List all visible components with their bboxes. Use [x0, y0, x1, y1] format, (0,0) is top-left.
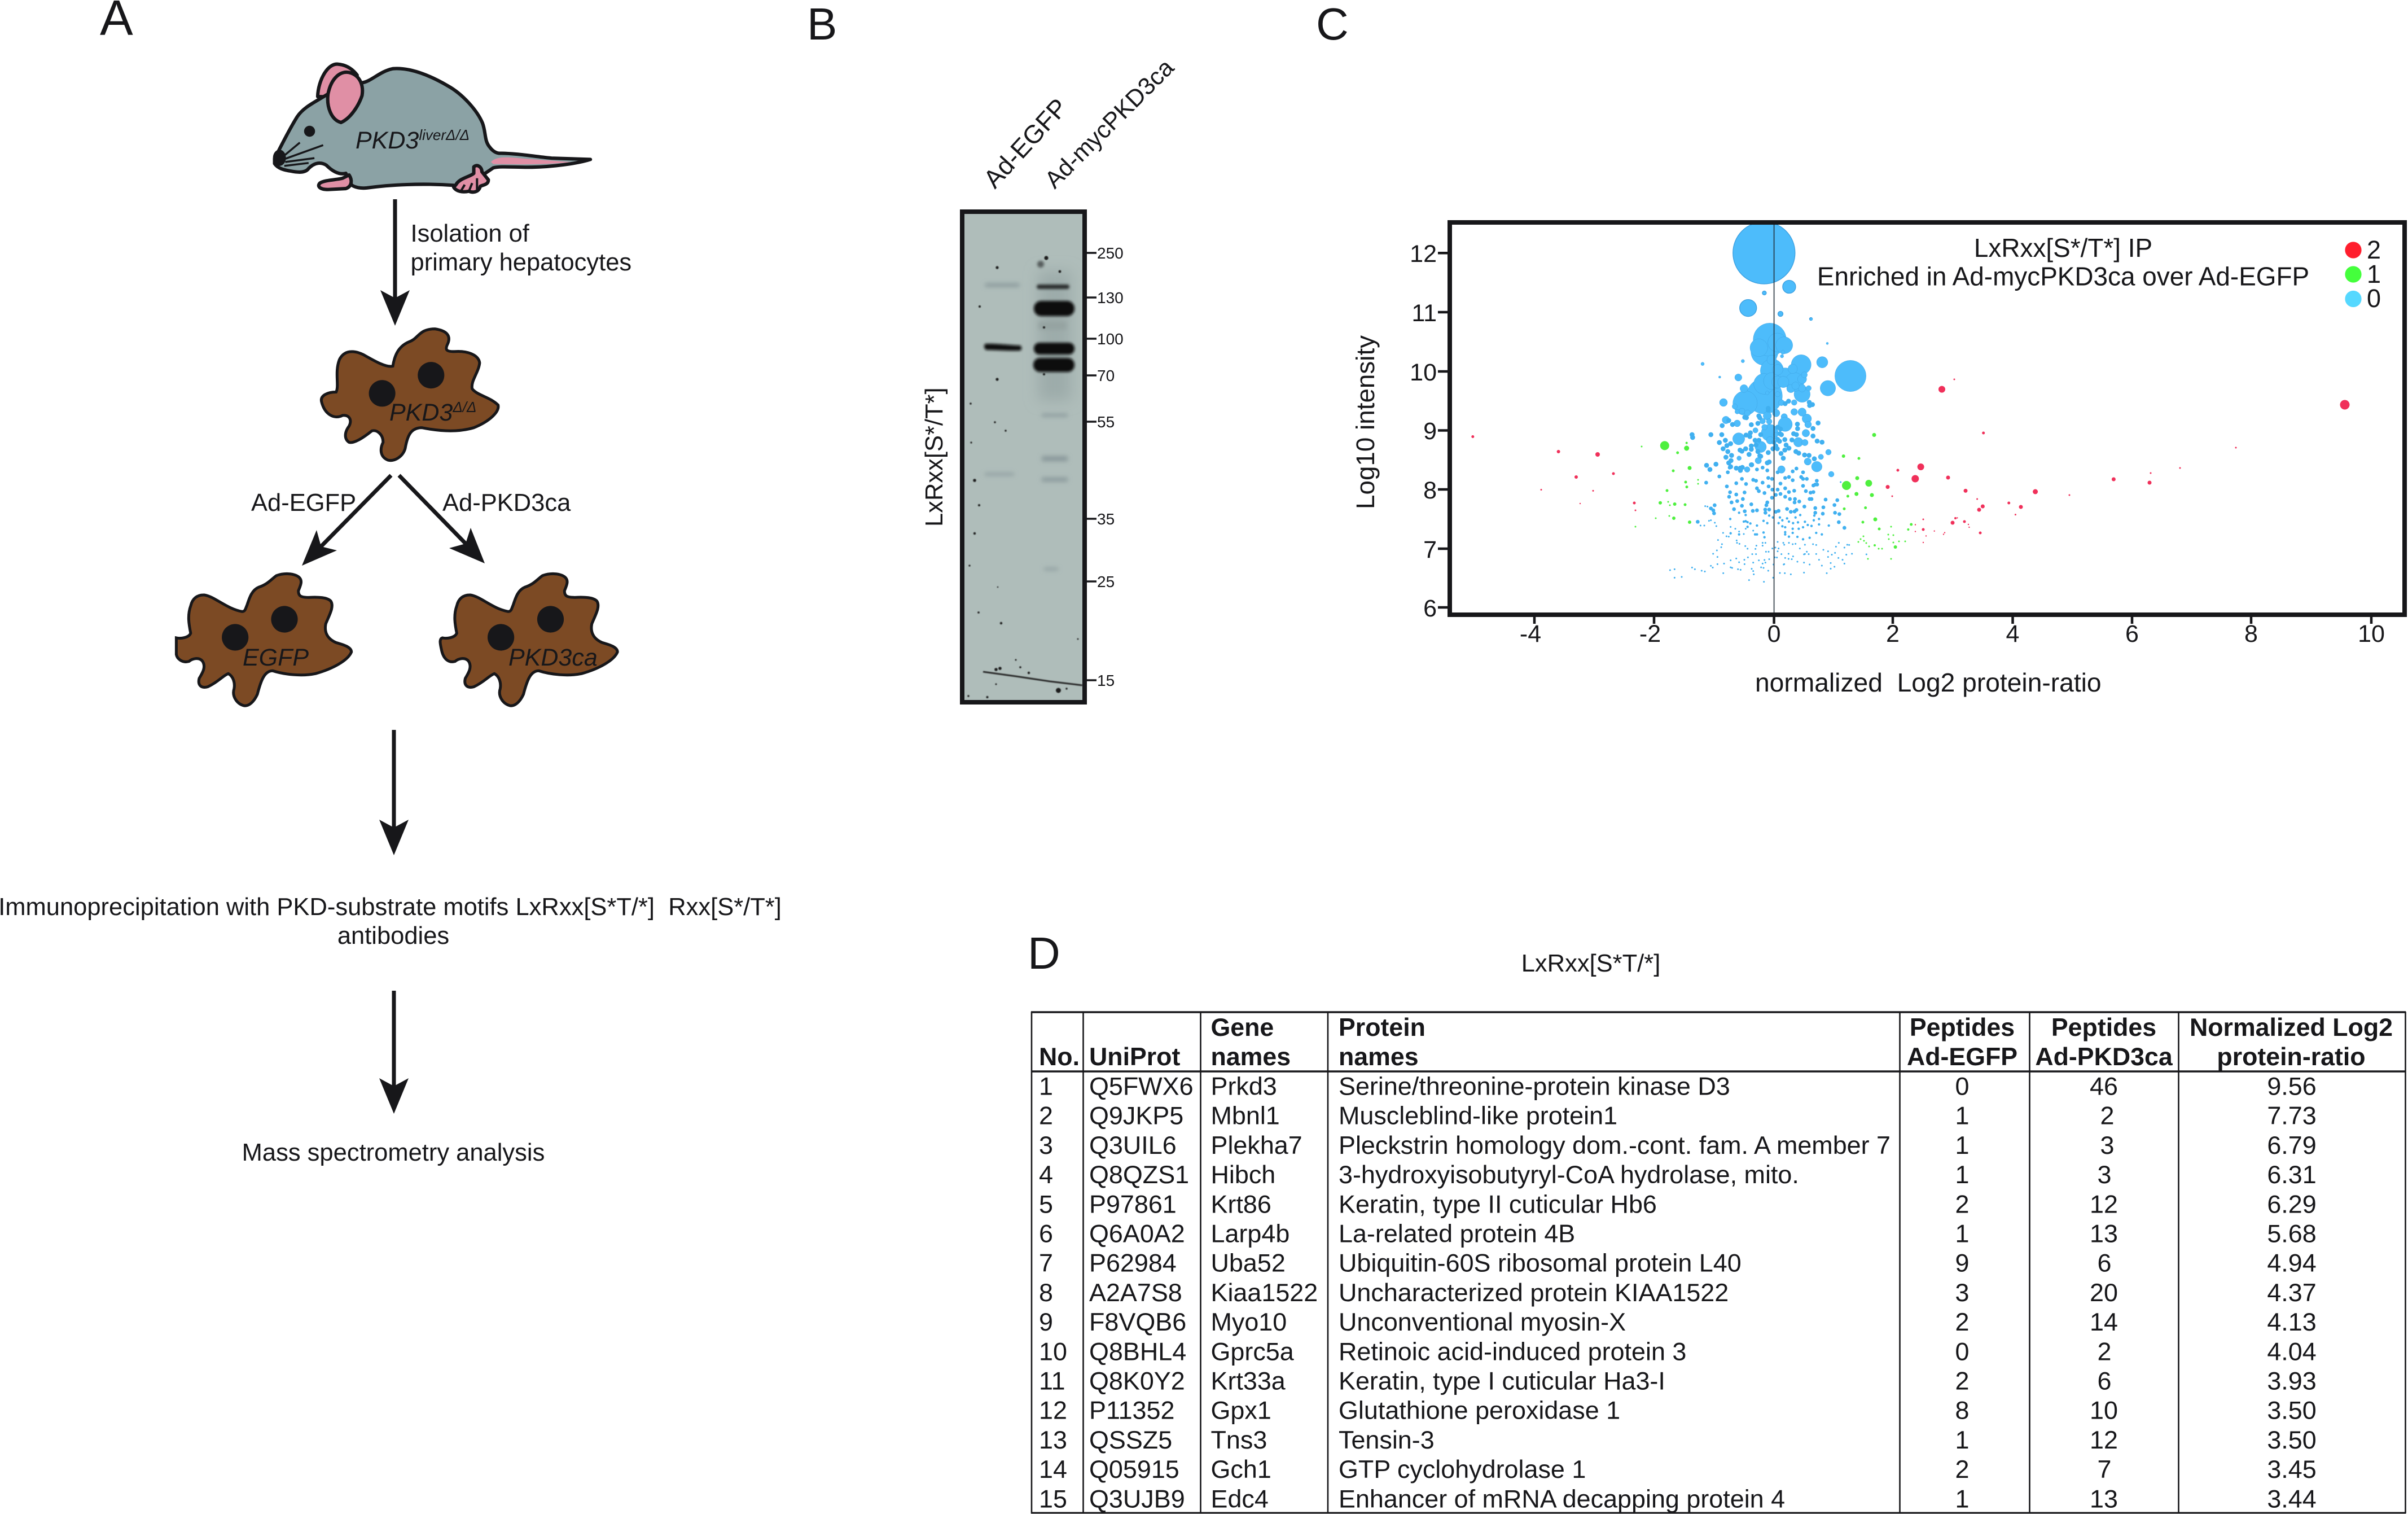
- plot frame and zero line: [1450, 222, 2405, 615]
- row 9: Myo10: [1211, 1307, 1287, 1336]
- row 9: 4.13: [2267, 1307, 2317, 1336]
- icon: EGFP hepatocyte: EGFP: [243, 644, 309, 671]
- row 1: Serine/threonine-protein kinase D3: [1339, 1071, 1730, 1101]
- row 1: 1: [1039, 1071, 1053, 1101]
- row 8: 8: [1039, 1278, 1053, 1307]
- molecular weight markers: 25: [1097, 573, 1115, 590]
- row 8: 3: [1955, 1278, 1969, 1307]
- row 15: 1: [1955, 1484, 1969, 1513]
- row 8: A2A7S8: [1089, 1278, 1182, 1307]
- row 13: QSSZ5: [1089, 1425, 1172, 1454]
- row 2: [1039, 1101, 2317, 1130]
- one-peptide proteins: green dots: [1634, 433, 1913, 560]
- blot image: [962, 212, 1085, 702]
- table header: UniProt: [1089, 1043, 1180, 1071]
- row 10: 10: [1039, 1337, 1067, 1366]
- row 9: F8VQB6: [1089, 1307, 1186, 1336]
- row 13: [1039, 1425, 2317, 1454]
- row 6: 6: [1039, 1219, 1053, 1248]
- x axis title: normalized Log2 protein-ratio: [1755, 668, 2102, 697]
- row 9: [1039, 1307, 2317, 1336]
- row 2: 1: [1955, 1101, 1969, 1130]
- chart title: Enriched in Ad-mycPKD3ca over Ad-EGFP: [1817, 262, 2309, 291]
- row 9: 2: [1955, 1307, 1969, 1336]
- y axis ticks and labels: 10: [1410, 359, 1437, 386]
- zero-peptide proteins: lower medium dots: [1698, 464, 1844, 528]
- row 9: Unconventional myosin-X: [1339, 1307, 1626, 1336]
- row 15: Enhancer of mRNA decapping protein 4: [1339, 1484, 1785, 1513]
- row 9: 14: [2090, 1307, 2118, 1336]
- row 2: Q9JKP5: [1089, 1101, 1183, 1130]
- row 15: [1039, 1484, 2317, 1513]
- row 3: 6.79: [2267, 1131, 2317, 1159]
- table title: LxRxx[S*T/*]: [1521, 950, 1660, 977]
- row 14: 14: [1039, 1455, 1067, 1484]
- x axis ticks and labels: 8: [2244, 620, 2258, 647]
- row 3: [1039, 1131, 2317, 1159]
- row 5: Krt86: [1211, 1189, 1271, 1218]
- icon: PKD3ca hepatocyte: PKD3ca: [508, 644, 598, 671]
- row 12: 12: [1039, 1396, 1067, 1425]
- arrow: to PKD3ca cell: [399, 475, 485, 563]
- y axis ticks and labels: [1410, 240, 1448, 622]
- row 5: [1039, 1189, 2317, 1218]
- x axis ticks and labels: -4: [1520, 620, 1541, 647]
- row 12: [1039, 1396, 2317, 1425]
- zero-peptide proteins: top bubbles: [1733, 222, 1813, 321]
- zero-peptide proteins: small dots: [1730, 513, 1829, 539]
- row 11: 11: [1039, 1366, 1065, 1395]
- arrow: mouse to hepatocyte: [380, 199, 410, 326]
- table grid: [1031, 1012, 2406, 1513]
- row 11: Keratin, type I cuticular Ha3-I: [1339, 1366, 1665, 1395]
- x axis ticks and labels: 10: [2358, 620, 2385, 647]
- row 5: P97861: [1089, 1189, 1177, 1218]
- legend: [2345, 235, 2381, 313]
- row 11: [1039, 1366, 2317, 1395]
- chart title: LxRxx[S*/T*] IP: [1974, 233, 2152, 262]
- row 2: Muscleblind-like protein1: [1339, 1101, 1617, 1130]
- row 7: 9: [1955, 1249, 1969, 1277]
- row 12: 3.50: [2267, 1396, 2317, 1425]
- text: immunoprecipitation step: antibodies: [337, 922, 449, 949]
- row 14: Q05915: [1089, 1455, 1179, 1484]
- arrow: to immunoprecipitation: [379, 730, 409, 855]
- row 7: 6: [2098, 1249, 2111, 1277]
- row 12: Glutathione peroxidase 1: [1339, 1396, 1620, 1425]
- row 13: 12: [2090, 1425, 2118, 1454]
- row 14: GTP cyclohydrolase 1: [1339, 1455, 1586, 1484]
- panel letter C: C: [1316, 0, 1349, 49]
- row 4: 3-hydroxyisobutyryl-CoA hydrolase, mito.: [1339, 1160, 1799, 1189]
- row 11: 2: [1955, 1366, 1969, 1395]
- table header: Gene: [1211, 1014, 1274, 1042]
- row 7: 7: [1039, 1249, 1053, 1277]
- text: Ad-PKD3ca arm label: Ad-PKD3ca: [442, 489, 571, 517]
- text: isolation of primary hepatocytes: Isolation of: [411, 220, 529, 247]
- row 4: Q8QZS1: [1089, 1160, 1189, 1189]
- panel letter D: D: [1028, 928, 1060, 978]
- y axis ticks and labels: 11: [1411, 300, 1437, 327]
- mouse genotype label: liverΔ/Δ: [419, 126, 470, 143]
- row 15: Edc4: [1211, 1484, 1269, 1513]
- row 1: 9.56: [2267, 1071, 2317, 1101]
- row 6: [1039, 1219, 2317, 1248]
- icon: EGFP hepatocyte: [176, 574, 352, 706]
- row 8: Uncharacterized protein KIAA1522: [1339, 1278, 1729, 1307]
- row 6: 13: [2090, 1219, 2118, 1248]
- row 10: [1039, 1337, 2317, 1366]
- row 14: [1039, 1455, 2317, 1484]
- row 5: 2: [1955, 1189, 1969, 1218]
- row 3: 3: [1039, 1131, 1053, 1159]
- row 3: 1: [1955, 1131, 1969, 1159]
- row 4: 6.31: [2267, 1160, 2317, 1189]
- row 12: P11352: [1089, 1396, 1174, 1425]
- row 14: Gch1: [1211, 1455, 1271, 1484]
- row 15: 15: [1039, 1484, 1067, 1513]
- row 5: 6.29: [2267, 1189, 2317, 1218]
- x axis ticks and labels: 4: [2006, 620, 2019, 647]
- x axis ticks and labels: [1520, 616, 2385, 647]
- row 11: 6: [2098, 1366, 2111, 1395]
- row 3: Pleckstrin homology dom.-cont. fam. A member 7: [1339, 1131, 1891, 1159]
- axis label LxRxx: LxRxx[S*/T*]: [921, 387, 948, 527]
- y axis ticks and labels: 6: [1423, 595, 1437, 622]
- molecular weight markers: 250: [1097, 244, 1124, 262]
- panel letter B: B: [807, 0, 837, 49]
- row 1: 0: [1955, 1071, 1969, 1101]
- row 5: 5: [1039, 1189, 1053, 1218]
- lane label Ad-mycPKD3ca: Ad-mycPKD3ca: [1039, 54, 1179, 194]
- mouse genotype label: PKD3: [356, 127, 419, 154]
- row 8: 20: [2090, 1278, 2118, 1307]
- text: Ad-EGFP arm label: Ad-EGFP: [251, 489, 356, 517]
- y axis ticks and labels: 7: [1423, 536, 1437, 563]
- row 7: P62984: [1089, 1249, 1177, 1277]
- table header: Ad-PKD3ca: [2035, 1043, 2173, 1071]
- row 6: La-related protein 4B: [1339, 1219, 1575, 1248]
- row 10: Retinoic acid-induced protein 3: [1339, 1337, 1686, 1366]
- text: immunoprecipitation step: Immunoprecipitation with PKD-substrate motifs LxRxx[S*T/*] Rxx[S*/T*]: [0, 894, 782, 921]
- arrow: to mass spectrometry: [379, 991, 409, 1114]
- row 4: 1: [1955, 1160, 1969, 1189]
- y axis ticks and labels: 8: [1423, 477, 1437, 504]
- row 1: [1039, 1071, 2317, 1101]
- row 8: [1039, 1278, 2317, 1307]
- row 13: 3.50: [2267, 1425, 2317, 1454]
- row 4: Hibch: [1211, 1160, 1275, 1189]
- x axis ticks and labels: 0: [1767, 620, 1781, 647]
- x axis ticks and labels: 6: [2125, 620, 2139, 647]
- lane label Ad-EGFP: Ad-EGFP: [978, 93, 1073, 194]
- panel D: enriched protein table: [1028, 928, 2406, 1513]
- row 4: 4: [1039, 1160, 1053, 1189]
- row 12: 10: [2090, 1396, 2118, 1425]
- row 7: Uba52: [1211, 1249, 1286, 1277]
- molecular weight markers: 70: [1097, 367, 1115, 384]
- row 11: Q8K0Y2: [1089, 1366, 1185, 1395]
- row 10: 2: [2098, 1337, 2111, 1366]
- row 13: 1: [1955, 1425, 1969, 1454]
- row 1: Q5FWX6: [1089, 1071, 1194, 1101]
- two-peptide proteins: red dots: [1471, 378, 2350, 543]
- row 15: 3.44: [2267, 1484, 2317, 1513]
- row 10: Q8BHL4: [1089, 1337, 1186, 1366]
- table header: Peptides: [1910, 1014, 2015, 1042]
- row 6: Larp4b: [1211, 1219, 1289, 1248]
- table header: Normalized Log2: [2190, 1014, 2393, 1042]
- icon: PKD3ca hepatocyte: [440, 574, 617, 706]
- text: mass spectrometry step: Mass spectrometry analysis: [242, 1139, 545, 1166]
- molecular weight markers: 15: [1097, 672, 1115, 689]
- row 13: Tns3: [1211, 1425, 1267, 1454]
- row 7: 4.94: [2267, 1249, 2317, 1277]
- row 6: Q6A0A2: [1089, 1219, 1185, 1248]
- table header: No.: [1039, 1043, 1080, 1071]
- legend: 2: [2367, 235, 2381, 264]
- row 5: 12: [2090, 1189, 2118, 1218]
- row 4: 3: [2098, 1160, 2111, 1189]
- molecular weight markers: 35: [1097, 510, 1115, 528]
- table header: names: [1339, 1043, 1419, 1071]
- table rows: [1039, 1071, 2317, 1513]
- icon: primary hepatocyte PKD3 deleted: Δ/Δ: [452, 399, 476, 415]
- row 2: 2: [2100, 1101, 2114, 1130]
- y axis ticks and labels: 9: [1423, 418, 1437, 445]
- row 1: 46: [2090, 1071, 2118, 1101]
- row 7: Ubiquitin-60S ribosomal protein L40: [1339, 1249, 1742, 1277]
- y axis title: Log10 intensity: [1351, 335, 1380, 509]
- row 3: Q3UIL6: [1089, 1131, 1177, 1159]
- legend: 0: [2367, 284, 2381, 313]
- row 6: 1: [1955, 1219, 1969, 1248]
- row 4: [1039, 1160, 2317, 1189]
- row 5: Keratin, type II cuticular Hb6: [1339, 1189, 1657, 1218]
- table header: Ad-EGFP: [1907, 1043, 2017, 1071]
- row 2: Mbnl1: [1211, 1101, 1280, 1130]
- row 11: Krt33a: [1211, 1366, 1286, 1395]
- icon: mouse: [273, 64, 590, 192]
- zero-peptide proteins: tiny dots: [1670, 482, 1866, 582]
- text: isolation of primary hepatocytes: primary hepatocytes: [411, 249, 631, 276]
- row 1: Prkd3: [1211, 1071, 1277, 1101]
- plotted proteins: [1471, 222, 2350, 582]
- x axis ticks and labels: 2: [1886, 620, 1900, 647]
- row 9: 9: [1039, 1307, 1053, 1336]
- molecular weight markers: 130: [1097, 289, 1124, 307]
- molecular weight markers: [1087, 244, 1124, 689]
- row 15: Q3UJB9: [1089, 1484, 1185, 1513]
- icon: primary hepatocyte PKD3 deleted: [321, 329, 498, 461]
- table header: Protein: [1339, 1014, 1425, 1042]
- row 15: 13: [2090, 1484, 2118, 1513]
- molecular weight markers: 100: [1097, 330, 1124, 348]
- row 7: [1039, 1249, 2317, 1277]
- table header: names: [1211, 1043, 1291, 1071]
- row 8: Kiaa1522: [1211, 1278, 1318, 1307]
- row 12: 8: [1955, 1396, 1969, 1425]
- zero-peptide proteins: scattered medium dots: [1692, 401, 1822, 470]
- row 2: 7.73: [2267, 1101, 2317, 1130]
- panel B: western blot: [807, 0, 1179, 702]
- row 11: 3.93: [2267, 1366, 2317, 1395]
- zero-peptide proteins: central bubble cluster: [1701, 318, 1866, 477]
- row 10: 0: [1955, 1337, 1969, 1366]
- panel A: experimental workflow: [0, 0, 782, 1166]
- row 8: 4.37: [2267, 1278, 2317, 1307]
- row 12: Gpx1: [1211, 1396, 1271, 1425]
- arrow: to EGFP cell: [302, 475, 391, 566]
- row 3: 3: [2100, 1131, 2114, 1159]
- row 14: 3.45: [2267, 1455, 2317, 1484]
- row 13: 13: [1039, 1425, 1067, 1454]
- row 14: 2: [1955, 1455, 1969, 1484]
- icon: primary hepatocyte PKD3 deleted: PKD3: [389, 399, 453, 426]
- legend: 1: [2367, 260, 2381, 288]
- y axis ticks and labels: 12: [1410, 240, 1437, 268]
- row 10: Gprc5a: [1211, 1337, 1294, 1366]
- row 3: Plekha7: [1211, 1131, 1302, 1159]
- panel C: scatter plot: [1316, 0, 2405, 697]
- row 14: 7: [2098, 1455, 2111, 1484]
- molecular weight markers: 55: [1097, 413, 1115, 431]
- table header: protein-ratio: [2217, 1043, 2366, 1071]
- row 2: 2: [1039, 1101, 1053, 1130]
- row 6: 5.68: [2267, 1219, 2317, 1248]
- table header: [1039, 1014, 2393, 1071]
- x axis ticks and labels: -2: [1639, 620, 1661, 647]
- row 10: 4.04: [2267, 1337, 2317, 1366]
- row 13: Tensin-3: [1339, 1425, 1435, 1454]
- table header: Peptides: [2051, 1014, 2156, 1042]
